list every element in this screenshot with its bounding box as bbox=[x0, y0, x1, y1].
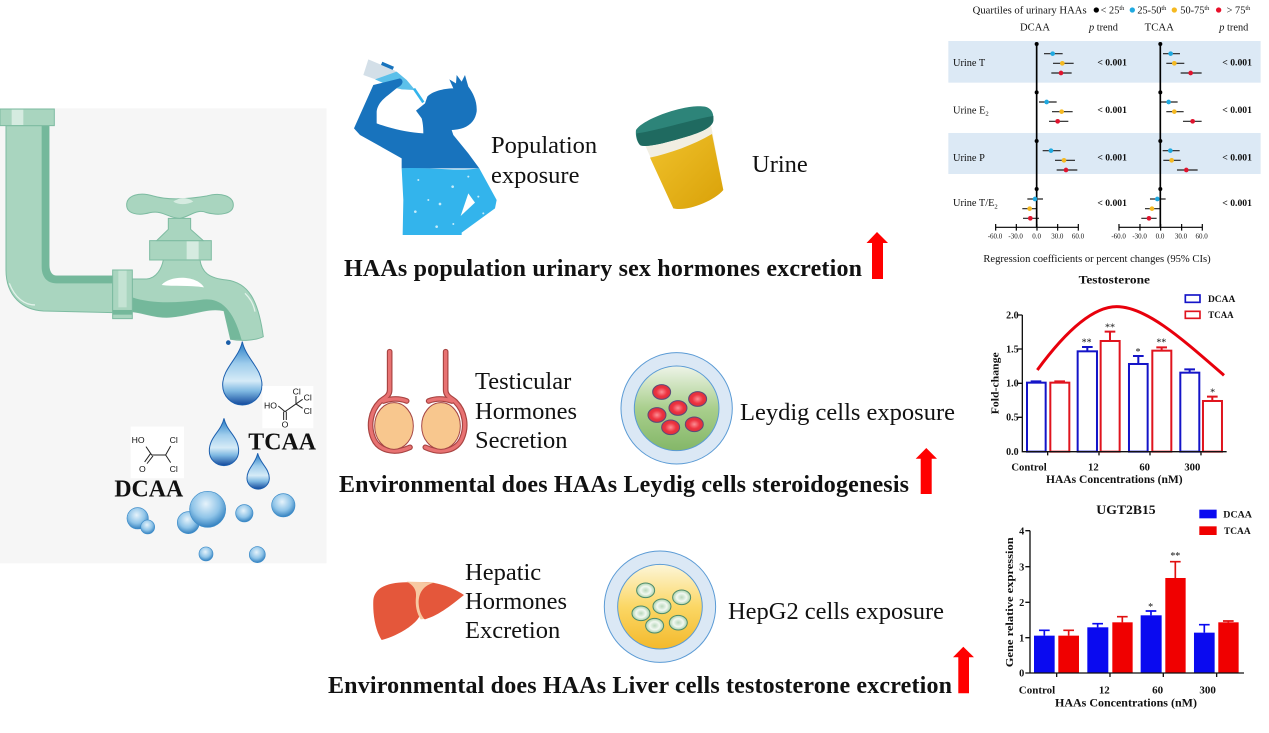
heading: population finding: HAAs population urinary sex hormones excretion bbox=[344, 256, 862, 282]
forest plot tick labels bbox=[988, 233, 1208, 241]
significance marks: * bbox=[1135, 347, 1140, 358]
icon: Leydig cells dish bbox=[621, 353, 732, 464]
text: population exposure: Population bbox=[491, 132, 597, 159]
text: testicular hormones secretion: Testicular bbox=[475, 368, 571, 395]
TCAA outlined bars bbox=[1050, 332, 1222, 452]
forest plot column headers: p trend bbox=[1218, 23, 1249, 34]
molecule: trichloroacetic acid: HO bbox=[264, 400, 277, 410]
UGT2B15 y tick labels bbox=[1019, 526, 1024, 680]
p trend values: < 0.001 bbox=[1097, 58, 1127, 69]
icon: person drinking water bbox=[354, 59, 497, 235]
molecule: dichloroacetic acid: O bbox=[139, 464, 146, 474]
significance marks: ** bbox=[1105, 323, 1115, 334]
icon: faucet bbox=[0, 109, 263, 340]
forest plot legend: th bbox=[1119, 5, 1125, 12]
forest plot column headers: TCAA bbox=[1145, 23, 1175, 34]
DCAA filled bars bbox=[1034, 611, 1215, 673]
UGT2B15 legend: TCAA bbox=[1224, 526, 1251, 537]
forest plot legend: 25-50 bbox=[1137, 6, 1161, 17]
UGT2B15 y tick labels: 1 bbox=[1019, 633, 1024, 644]
row labels: 2 bbox=[994, 203, 998, 210]
shaded bands bbox=[948, 41, 1261, 174]
forest plot legend: > 75 bbox=[1227, 6, 1245, 17]
chart: forest plot of urinary hormones bbox=[948, 5, 1261, 265]
p trend values: < 0.001 bbox=[1222, 153, 1252, 164]
UGT2B15 legend bbox=[1199, 509, 1252, 537]
forest plot legend bbox=[973, 5, 1251, 17]
UGT2B15 x tick labels bbox=[1019, 685, 1216, 697]
point estimates bbox=[1027, 42, 1195, 221]
icon: water bubbles bbox=[127, 491, 295, 563]
forest plot tick labels: -60.0 bbox=[988, 233, 1003, 241]
p trend values: < 0.001 bbox=[1097, 153, 1127, 164]
text: HepG2 cells exposure: HepG2 cells exposure bbox=[728, 598, 944, 625]
forest plot legend: Quartiles of urinary HAAs bbox=[973, 6, 1087, 17]
UGT2B15 significance marks: * bbox=[1148, 602, 1153, 613]
label: TCAA: TCAA bbox=[248, 430, 317, 456]
significance marks: * bbox=[1210, 387, 1215, 398]
forest plot legend: th bbox=[1204, 5, 1210, 12]
faucet panel background bbox=[0, 108, 327, 563]
testosterone chart title: Testosterone bbox=[1079, 273, 1151, 287]
significance marks: ** bbox=[1156, 337, 1166, 348]
p trend values: < 0.001 bbox=[1222, 105, 1252, 116]
testosterone legend: TCAA bbox=[1208, 311, 1234, 321]
significance marks: ** bbox=[1082, 337, 1092, 348]
icon: urine cup bbox=[636, 106, 723, 209]
UGT2B15 y tick labels: 4 bbox=[1019, 526, 1024, 537]
UGT2B15 legend: DCAA bbox=[1223, 509, 1252, 520]
DCAA outlined bars bbox=[1027, 347, 1199, 452]
testosterone y tick labels: 1.5 bbox=[1006, 344, 1019, 355]
testosterone y tick labels: 0.0 bbox=[1006, 447, 1019, 458]
text: hepatic hormones excretion: Hormones bbox=[465, 588, 567, 615]
UGT2B15 x tick labels: 60 bbox=[1152, 685, 1164, 697]
UGT2B15 significance marks bbox=[1148, 551, 1180, 613]
row labels: Urine T bbox=[953, 58, 986, 69]
arrow: up Leydig bbox=[916, 448, 937, 494]
testosterone y axis title: Fold-change bbox=[990, 352, 1002, 414]
arrow: up liver bbox=[953, 647, 974, 693]
molecule: trichloroacetic acid bbox=[262, 386, 313, 429]
icon: liver bbox=[373, 582, 464, 640]
UGT2B15 chart title: UGT2B15 bbox=[1096, 502, 1156, 517]
confidence intervals bbox=[1022, 54, 1202, 218]
icon: testes bbox=[371, 352, 465, 451]
row labels: Urine T/E bbox=[953, 198, 994, 209]
p trend values: < 0.001 bbox=[1097, 198, 1127, 209]
testosterone y tick labels: 2.0 bbox=[1006, 310, 1019, 321]
UGT2B15 y tick labels: 3 bbox=[1019, 562, 1024, 573]
text: testicular hormones secretion: Secretion bbox=[475, 427, 568, 454]
forest plot column headers bbox=[1020, 23, 1249, 34]
p trend values bbox=[1097, 58, 1252, 209]
row labels bbox=[953, 58, 998, 210]
UGT2B15 x tick labels: Control bbox=[1019, 685, 1055, 697]
text: hepatic hormones excretion: Hepatic bbox=[465, 559, 541, 586]
forest plot legend: th bbox=[1245, 5, 1251, 12]
text: Leydig cells exposure: Leydig cells exposure bbox=[740, 399, 955, 426]
p trend values: < 0.001 bbox=[1222, 198, 1252, 209]
testosterone y tick labels: 1.0 bbox=[1006, 379, 1019, 390]
forest plot tick labels: 30.0 bbox=[1175, 233, 1188, 241]
text: urine: Urine bbox=[752, 151, 808, 178]
molecule: trichloroacetic acid: O bbox=[282, 419, 289, 429]
testosterone x tick labels: 300 bbox=[1184, 463, 1200, 474]
row labels: Urine E bbox=[953, 105, 985, 116]
testosterone x tick labels: 12 bbox=[1088, 463, 1099, 474]
testosterone x tick labels bbox=[1011, 463, 1200, 474]
UGT2B15 y tick labels: 2 bbox=[1019, 598, 1024, 609]
label: DCAA: DCAA bbox=[114, 477, 184, 503]
forest plot tick labels: 0.0 bbox=[1032, 233, 1042, 241]
forest plot tick labels: 30.0 bbox=[1051, 233, 1064, 241]
molecule: dichloroacetic acid: HO bbox=[132, 435, 145, 445]
chart: testosterone fold-change bars bbox=[990, 273, 1236, 486]
UGT2B15 axes bbox=[1025, 531, 1244, 677]
text: hepatic hormones excretion: Excretion bbox=[465, 617, 560, 644]
testosterone x axis title: HAAs Concentrations (nM) bbox=[1046, 474, 1183, 486]
panel: faucet with dripping water bbox=[0, 108, 327, 563]
p trend values: < 0.001 bbox=[1222, 58, 1252, 69]
icon: HepG2 cells dish bbox=[604, 551, 716, 662]
UGT2B15 significance marks: ** bbox=[1170, 551, 1180, 562]
forest plot legend: th bbox=[1161, 5, 1167, 12]
forest plot tick labels: -60.0 bbox=[1111, 233, 1126, 241]
forest plot tick labels: -30.0 bbox=[1132, 233, 1147, 241]
text: testicular hormones secretion: Hormones bbox=[475, 398, 577, 425]
molecule: dichloroacetic acid: Cl bbox=[170, 435, 178, 445]
heading: Leydig finding: Environmental does HAAs Leydig cells steroidogenesis bbox=[339, 472, 909, 498]
heading: liver finding: Environmental does HAAs Liver cells testosterone excretion bbox=[328, 673, 952, 699]
testosterone legend bbox=[1185, 295, 1236, 321]
forest plot legend: < 25 bbox=[1101, 6, 1119, 17]
TCAA filled bars bbox=[1058, 562, 1239, 673]
p trend values: < 0.001 bbox=[1097, 105, 1127, 116]
molecule: dichloroacetic acid bbox=[131, 427, 184, 478]
testosterone legend: DCAA bbox=[1208, 295, 1236, 305]
forest plot axis title: Regression coefficients or percent changes (95% CIs) bbox=[983, 254, 1211, 265]
trend curve bbox=[1037, 307, 1224, 375]
UGT2B15 y tick labels: 0 bbox=[1019, 669, 1024, 680]
testosterone x tick labels: Control bbox=[1011, 463, 1047, 474]
testosterone y tick labels bbox=[1006, 310, 1019, 458]
testosterone x tick labels: 60 bbox=[1139, 463, 1150, 474]
UGT2B15 x tick labels: 12 bbox=[1099, 685, 1110, 697]
arrow: up population bbox=[866, 232, 888, 279]
forest plot column headers: p trend bbox=[1088, 23, 1119, 34]
chart: UGT2B15 expression bars bbox=[1004, 502, 1252, 710]
forest plot tick labels: 60.0 bbox=[1196, 233, 1208, 241]
molecule: trichloroacetic acid: Cl bbox=[293, 387, 301, 397]
significance marks bbox=[1082, 323, 1215, 398]
testosterone y tick labels: 0.5 bbox=[1006, 413, 1019, 424]
molecule: dichloroacetic acid: Cl bbox=[170, 464, 178, 474]
forest plot tick labels: -30.0 bbox=[1008, 233, 1023, 241]
forest plot column headers: DCAA bbox=[1020, 23, 1051, 34]
icon: water drops bbox=[209, 340, 269, 489]
forest plot axes bbox=[996, 44, 1202, 231]
forest plot tick labels: 60.0 bbox=[1072, 233, 1085, 241]
molecule: trichloroacetic acid: Cl bbox=[304, 392, 312, 402]
forest plot legend: 50-75 bbox=[1180, 6, 1204, 17]
row labels: Urine P bbox=[953, 153, 985, 164]
UGT2B15 x axis title: HAAs Concentrations (nM) bbox=[1055, 697, 1197, 710]
text: population exposure: exposure bbox=[491, 162, 580, 189]
molecule: trichloroacetic acid: Cl bbox=[304, 406, 312, 416]
row labels: 2 bbox=[985, 111, 989, 118]
testosterone axes bbox=[1017, 315, 1227, 455]
UGT2B15 y axis title: Gene relative expression bbox=[1004, 537, 1016, 667]
UGT2B15 x tick labels: 300 bbox=[1199, 685, 1216, 697]
forest plot tick labels: 0.0 bbox=[1156, 233, 1165, 241]
